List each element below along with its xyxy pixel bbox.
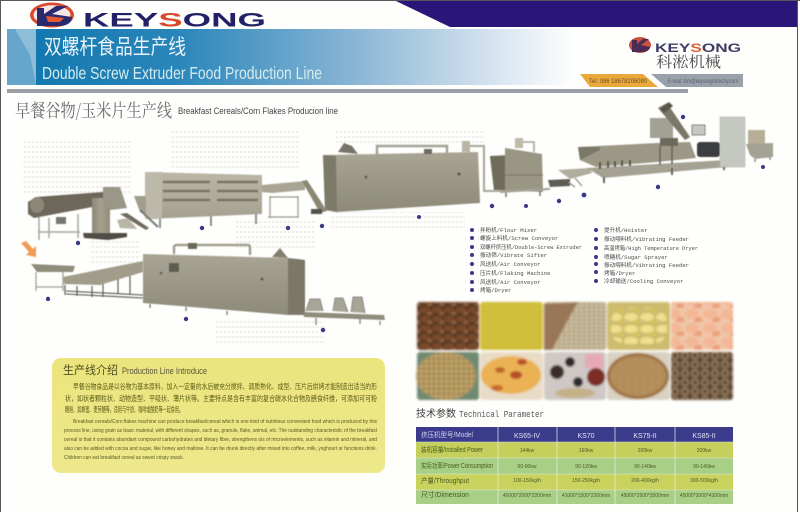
contact: email tag [651, 74, 743, 87]
legend: left column: 双螺杆挤压机/Double-Screw Extruder [480, 243, 582, 251]
technical parameter table: KS65-IV [514, 433, 540, 440]
technical parameter table: 装机容量/Installed Power [421, 445, 484, 454]
contact: telephone tag [580, 74, 658, 87]
logo: Keysong top left [30, 2, 266, 32]
grey divider [7, 89, 688, 93]
panel heading [63, 362, 207, 378]
Chinese introduction text: 状，如状者颗粒状、动物造型、平吸状、薄片状等。主要特点是含有丰富的复合碳水化合物及膳食纤维，可添加可可粉 [65, 394, 377, 404]
logo: Keysong right with Chinese name [629, 37, 741, 72]
legend: left column: 压片机/Flaking Machine [480, 269, 550, 277]
technical parameter heading: 技术参数 [416, 405, 456, 420]
technical parameter table: 200kw [638, 448, 653, 454]
technical parameter table: 挤压机型号/Model [421, 430, 473, 439]
legend: right column [594, 226, 698, 285]
contact: email tag: E-mail: tom@keysongindustry.com [668, 79, 738, 85]
logo: Keysong top left: KEY S ONG [83, 10, 266, 32]
legend: right column: 冷却输送/Cooling Conveyor [604, 277, 683, 285]
machine: third oven (high temperature dryer) [323, 141, 501, 212]
English introduction text: process line, using grain as basic material, with different shapes, such as, granule, flake, animal, etc. The outstanding characteristic of the breakfast [64, 428, 378, 434]
technical parameter table: 90-140kw [634, 464, 656, 470]
English introduction text [64, 419, 378, 461]
technical parameter table: 100-150kg/h [513, 478, 541, 484]
machine: second oven [143, 243, 305, 315]
legend: right column: 振动喂料机/Vibrating Feeder [604, 235, 689, 243]
technical parameter table: 200kw [697, 448, 712, 454]
legend: left column [470, 226, 582, 294]
section heading: Breakfast Cereals/Corn Flakes Producion line [178, 106, 338, 116]
panel: production line introduction [52, 358, 385, 473]
machine: small conveyors [548, 168, 592, 187]
English introduction text: Children can eat breakfast cereal as sweet crispy snack. [64, 455, 184, 461]
legend: right column: 烤箱/Dryer [604, 269, 635, 277]
technical parameter table: KS85-II [692, 433, 716, 440]
technical parameter table: 150-250kg/h [572, 478, 600, 484]
English introduction text: Breakfast cereals/Corn flakes machine can produce breakfast/cereal which is one kind of nutritious convenient food which is produced by this [73, 419, 377, 425]
legend: left column: 螺旋上料机/Screw Conveyor [480, 234, 558, 242]
technical parameter table: KS75-II [633, 433, 657, 440]
legend: left column: 风送机/Air Conveyor [480, 260, 540, 268]
machine: flaking machine [490, 138, 550, 197]
section heading: 早餐谷物/玉米片生产线 [15, 97, 172, 123]
machine: control cabinet [720, 117, 745, 167]
logo: Keysong right with Chinese name: KEY S ONG [655, 41, 741, 55]
contact: telephone tag: Tel: 086 18678206090 [589, 78, 647, 85]
legend: left column: 风送机/Air Conveyor [480, 278, 540, 286]
Chinese introduction text [65, 382, 377, 415]
legend: left column: 振动筛/Vibrate Sifter [480, 251, 547, 259]
banner title Chinese: 双螺杆食品生产线 [44, 31, 186, 61]
logo: Keysong right with Chinese name: 科淞机械 [656, 51, 721, 72]
section heading [15, 97, 338, 123]
machine: flavouring drum and hoist [28, 187, 149, 240]
technical parameter table: 90-120kw [575, 464, 597, 470]
machine: first oven with slats [134, 172, 327, 228]
Chinese introduction text: 糖粉、如蜂蜜、麦芽糖等。适用与牛奶、咖啡或酸奶等一起食用。 [65, 405, 183, 415]
technical parameter table: 41000*1500*2200mm [562, 493, 610, 499]
technical parameter table: 60-90kw [518, 464, 537, 470]
orange arrow between rows [21, 241, 36, 257]
technical parameter table: KS70 [577, 433, 595, 440]
machine: double screw extruder [578, 102, 727, 183]
technical parameter table: 实际功率/Power Consumption [421, 461, 493, 470]
faint dotted background texture [22, 128, 485, 343]
technical parameter heading: Technical Parameter [459, 410, 544, 420]
technical parameter table: 160kw [579, 448, 594, 454]
technical parameter table: 产量/Throughput [421, 476, 469, 485]
technical parameter table: 45000*2500*3500mm [621, 493, 669, 499]
banner title English: Double Screw Extruder Food Production Line [42, 63, 322, 83]
technical parameter table: 40000*2000*2200mm [503, 493, 551, 499]
English introduction text: cereal is that it contains abundant compound carbohydrates and dietary fiber, strengthens ois of microelements, such as vitamin and mineral, and [64, 437, 377, 443]
cereal photo grid [416, 302, 733, 400]
legend: right column: 喷糖机/Sugar Sprayer [604, 253, 668, 261]
technical parameter table: 300-500kg/h [690, 478, 718, 484]
technical parameter heading [416, 405, 544, 420]
legend: left column: 拌粉机/Flour Mixer [480, 226, 537, 234]
technical parameter table: 45000*3000*4300mm [680, 493, 728, 499]
technical parameter table [416, 427, 733, 504]
machine: cooling conveyor [296, 297, 385, 325]
legend: right column: 高温烤箱/High Temperature Dryer [604, 244, 698, 252]
legend: right column: 提升机/Hoister [604, 226, 648, 234]
panel heading: 生产线介绍 [63, 362, 118, 378]
technical parameter table: 144kw [520, 448, 535, 454]
technical parameter table: 90-140kw [693, 464, 715, 470]
header navy band [396, 1, 797, 27]
panel heading: Production Line Introduce [122, 366, 207, 376]
Chinese introduction text: 早餐谷物食品是以谷物为基本原料，加入一定量的水后被充分搅拌、调质熟化、成型、压片后烘烤才能制造出适当的形 [73, 382, 377, 392]
numbered markers on machines [46, 115, 765, 332]
banner [7, 29, 577, 85]
English introduction text: also can be added with cocoa and sugar, like honey and maltose. It can be drunk directly after mixed into coffee, milk, yoghourt or functions drink. [64, 446, 377, 452]
legend: right column: 振动喂料机/Vibrating Feeder [604, 261, 689, 269]
machine: vibrating feeder and long conveyor [31, 261, 143, 298]
legend: left column: 烤箱/Dryer [480, 286, 511, 294]
machine: flour mixer [746, 130, 773, 162]
technical parameter table: 尺寸/Dimension [421, 490, 469, 499]
technical parameter table: 200-400kg/h [631, 478, 659, 484]
